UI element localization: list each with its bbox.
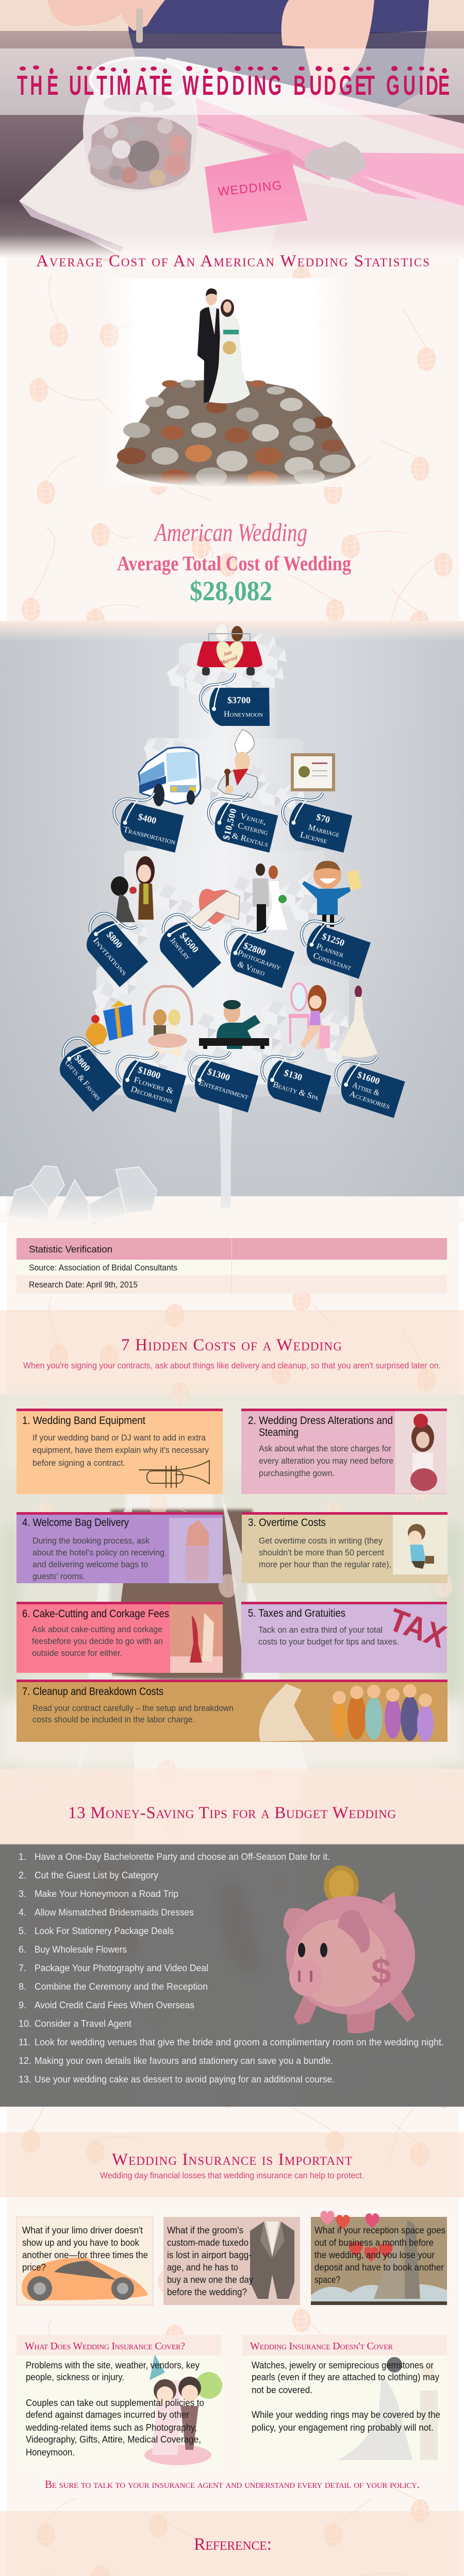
total cost callout: Average Total Cost of Wedding [117,552,351,575]
statistic verification table: Statistic Verification [29,1244,112,1255]
price tag: transportation: Transportation [122,825,176,846]
icon: just married car [197,624,262,675]
wedding cake cost breakdown [0,621,464,1224]
card 7: cleanup and breakdown costs: costs should be included in the labor charge. [32,1715,195,1724]
card 1: wedding band equipment: equipment, have them explain why it's necessary [32,1446,209,1455]
money-saving tips list on dark panel: Buy Wholesale Flowers [35,1944,127,1955]
hidden costs header band: 7 Hidden Costs of a Wedding [121,1336,342,1354]
icon: piggy bank with coin: $ [371,1951,391,1991]
card 5: taxes and gratuities: 5. Taxes and Gratuities [248,1607,345,1619]
insurance scenario card: reception: out of business a month before [314,2238,434,2248]
coin jar [83,58,197,192]
card 2: wedding dress alterations [241,1409,447,1494]
price tag: gifts and favors: $800 [72,1053,92,1073]
icon: piggy bank with coin [284,1866,415,2033]
insurance scenario card: limo [16,2217,153,2305]
money-saving tips list on dark panel: 11. [19,2037,31,2047]
panel: what insurance doesn't cover: policy, your engagement ring probably will not. [252,2422,434,2433]
insurance scenario card: reception: What if your reception space goes [314,2225,445,2235]
panel: what insurance doesn't cover: pearls (even if they are attached to clothing) may [252,2372,439,2382]
photo: cake topper couple on coin pile [103,278,356,487]
heading: average cost: Average Cost of An American Wedding Statistics [36,252,429,270]
pink sticky note: WEDDING [217,178,283,199]
card 1: wedding band equipment: 1. Wedding Band Equipment [22,1415,145,1427]
price tag: planner consultant: Consultant [312,951,353,972]
total cost callout: American Wedding [154,518,307,547]
price tag: transportation [108,785,188,853]
price tag: flowers and decorations: Decorations [130,1084,174,1106]
card 4: welcome bag delivery: During the booking process, ask [32,1536,150,1546]
pink satin ribbon [195,88,464,258]
illustration: orange sports car [22,2258,148,2301]
money-saving tips list on dark panel: 1. [19,1852,26,1862]
crystal brooch [305,141,366,180]
icon: wedding dress bride [337,986,377,1057]
card 4: welcome bag delivery: and delivering welcome bags to [32,1560,148,1569]
money-saving tips list on dark panel: Consider a Travel Agent [35,2019,131,2029]
coin pile [116,380,356,487]
insurance scenario card: reception: the wedding, and you lose your [314,2250,435,2260]
insurance scenario card: tuxedo [163,2217,300,2305]
price tag: attire and accessories: Attire & [351,1081,381,1098]
price tag: honeymoon: Honeymoon [224,710,263,719]
price tag: photography and video: & Video [237,960,266,978]
icon: proposal couple [111,856,155,922]
card 1: wedding band equipment: before signing a contract. [32,1459,125,1468]
main title: THE ULTIMATE WEDDING BUDGET GUIDE [17,70,450,101]
card 1: wedding band equipment: If your wedding band or DJ want to add in extra [32,1433,206,1443]
money-saving tips list on dark panel: 12. [19,2056,31,2066]
money-saving tips list on dark panel: Allow Mismatched Bridesmaids Dresses [35,1907,194,1918]
price tag: gifts and favors: Gifts & Favors [63,1058,103,1102]
price tag: planner consultant [293,906,376,979]
insurance scenario card: reception: deposit and have to book another [314,2262,444,2273]
price tag: venue, catering and rentals: $10,500 [221,807,239,841]
insurance scenario card: limo: show up and you have to book [22,2238,140,2248]
money-saving tips list on dark panel: 5. [19,1926,26,1936]
icon: flowers and couple [144,986,192,1056]
panel: what insurance covers: people, sickness or injury. [26,2372,124,2382]
insurance scenario card: tuxedo: buy a new one the day [167,2275,253,2285]
card 6: cake-cutting and corkage fees: 6. Cake-Cutting and Corkage Fees [22,1608,169,1620]
price tag: venue, catering and rentals: & Rentals [231,832,269,849]
insurance scenario card: reception: space? [314,2275,340,2285]
price tag: entertainment: Entertainment [197,1078,250,1101]
illustration: tuxedo jacket [250,2222,294,2299]
card 2: wedding dress alterations: 2. Wedding Dress Alterations and [248,1415,393,1427]
card 7: cleanup and breakdown costs: Read your contract carefully – the setup and breakdown [32,1704,234,1713]
total cost callout [117,518,351,606]
card 1: wedding band equipment [16,1409,223,1494]
illustration: running office man [393,1515,448,1574]
money-saving tips list on dark panel: 10. [19,2019,31,2029]
groom [197,289,222,403]
price tag: flowers and decorations: $1800 [137,1064,162,1081]
panel: what insurance covers [16,2335,222,2465]
card 6: cake-cutting and corkage fees: outside source for either. [32,1649,122,1658]
panel: what insurance doesn't cover: While your wedding rings may be covered by the [252,2410,440,2420]
money-saving tips list on dark panel: 3. [19,1889,26,1899]
panel: what insurance doesn't cover: Watches, jewelry or semiprecious gemstones or [252,2360,434,2370]
hidden costs header band [0,1310,464,1395]
insurance scenario card: tuxedo: custom-made tuxedo [167,2238,248,2248]
price tag: flowers and decorations: Flowers & [132,1075,175,1096]
card 4: welcome bag delivery: 4. Welcome Bag Delivery [22,1517,129,1529]
price tag: beauty and spa: $130 [283,1067,304,1082]
icon: TAX letters: TAX [384,1602,451,1655]
panel: what insurance covers: Problems with the site, weather, vendors, key [26,2360,200,2370]
card 3: overtime costs [242,1512,448,1583]
icon: DJ [199,1000,269,1049]
card 6: cake-cutting and corkage fees [16,1602,223,1673]
price tag: marriage license: Marriage [307,823,341,839]
card 3: overtime costs: shouldn't be more than 50 percent [259,1548,384,1557]
insurance scenario card: limo: another one—for three times the [22,2250,148,2260]
money-saving tips list on dark panel [0,1844,464,2107]
money-saving tips list on dark panel: Use your wedding cake as dessert to avoid paying for an additional course. [35,2074,335,2084]
price tag: beauty and spa [254,1042,336,1112]
card 3: overtime costs: Get overtime costs in writing (they [259,1536,383,1546]
hidden costs header band: When you're signing your contracts, ask about things like delivery and cleanup, so that you aren't surprised later on. [23,1361,441,1370]
icon: vanity girl [289,984,330,1049]
card 2: wedding dress alterations: every alteration you may need before [259,1456,393,1466]
price tag: photography and video: $2800 [242,940,268,958]
bride [209,299,250,403]
left hand dropping a coin [47,0,165,43]
illustration: watercolor couple [338,2357,438,2460]
insurance header band: Wedding Insurance is Important [112,2150,352,2169]
price tag: beauty and spa: Beauty & Spa [272,1080,320,1103]
white wedding book [19,58,464,258]
money-saving tips list on dark panel: 4. [19,1907,26,1918]
right hand [281,0,374,99]
total cost callout: $28,082 [190,575,272,606]
blurred bride photograph background [0,1395,464,2107]
panel: what insurance doesn't cover: not be covered. [252,2385,312,2395]
card 2: wedding dress alterations: purchasingthe gown. [259,1469,335,1478]
card 4: welcome bag delivery: about the hotel's policy on receiving [32,1548,164,1557]
illustration: sweeping man and children [259,1684,434,1742]
pink sticky note [205,151,308,233]
price tag: honeymoon: $3700 [227,695,251,705]
price tag: invitations: Invitations [91,936,129,977]
reference header band: Reference: [194,2535,272,2554]
card 6: cake-cutting and corkage fees: feesbefore you decide to go with an [32,1637,163,1646]
photo: bride with flower arch [395,1411,447,1494]
money-saving tips header band [0,1769,464,1844]
price tag: venue, catering and rentals [202,785,282,853]
price tag: attire and accessories: $1600 [356,1070,381,1087]
card 7: cleanup and breakdown costs [16,1680,448,1742]
insurance scenario card: tuxedo: age, and he has to [167,2262,238,2273]
icon: bus [139,748,201,806]
price tag: attire and accessories [328,1046,410,1118]
card 6: cake-cutting and corkage fees: Ask about cake-cutting and corkage [32,1625,162,1634]
card 4: welcome bag delivery [16,1512,223,1583]
illustration: couple with heart balloons [311,2211,447,2305]
insurance scenario card: tuxedo: is lost in airport bagg- [167,2250,252,2260]
insurance scenario card: limo: price? [22,2262,46,2273]
price tag: jewelry: $4500 [178,930,201,955]
card 3: overtime costs: 3. Overtime Costs [248,1517,326,1529]
money-saving tips header band: 13 Money-Saving Tips for a Budget Wedding [68,1804,396,1822]
hero photo: hands, coin jar and pink wedding book [0,0,464,258]
price tag: venue, catering and rentals: Venue, [239,811,267,826]
icon: bride and groom photo [253,863,288,933]
money-saving tips list on dark panel: Cut the Guest List by Category [35,1870,158,1880]
icon: chef [218,730,258,798]
price tag: marriage license: $70 [315,811,331,825]
panel: what insurance doesn't cover [242,2335,447,2465]
card 4: welcome bag delivery: guests' rooms. [32,1572,85,1581]
price tag: flowers and decorations [109,1042,191,1112]
cake tiers [73,632,372,1208]
icon: happy planner [302,861,362,927]
panel: what insurance covers: Honeymoon. [26,2447,75,2458]
card 5: taxes and gratuities: Tack on an extra third of your total [258,1625,383,1635]
price tag: photography and video: Photography [236,948,282,972]
money-saving tips list on dark panel: 8. [19,1981,26,1992]
price tag: gifts and favors [47,1025,133,1112]
panel: what insurance covers: Videography, Gifts, Attire, Medical Coverage, [26,2434,201,2445]
money-saving tips list on dark panel: Package Your Photography and Video Deal [35,1963,208,1973]
panel: what insurance covers: Couples can take out supplemental policies to [26,2398,204,2408]
card 7: cleanup and breakdown costs: 7. Cleanup and Breakdown Costs [22,1686,163,1698]
illustration: cartoon bride and groom on cake [144,2354,222,2465]
money-saving tips list on dark panel: Avoid Credit Card Fees When Overseas [35,2000,194,2010]
price tag: entertainment: $1300 [206,1066,231,1083]
money-saving tips list on dark panel: Making your own details like favours and stationery can save you a bundle. [35,2056,333,2066]
icon: marriage certificate [291,753,335,791]
money-saving tips list on dark panel: 13. [19,2074,31,2084]
statistic verification table: Research Date: April 9th, 2015 [29,1280,138,1290]
card 5: taxes and gratuities: costs to your budget for tips and taxes. [258,1637,399,1647]
insurance agent note: Be sure to talk to your insurance agent and understand every detail of your policy. [45,2478,420,2490]
insurance scenario card: tuxedo: What if the groom's [167,2225,243,2235]
statistic verification table: Source: Association of Bridal Consultants [29,1263,177,1273]
price tag: jewelry: Jewelry [168,936,192,962]
icon: gifts [86,1001,133,1046]
panel: what insurance doesn't cover: Wedding Insurance Doesn't Cover [250,2341,393,2352]
insurance scenario card: reception [311,2211,447,2305]
icon: ring hands [187,889,240,927]
price tag: photography and video [217,914,300,988]
card 3: overtime costs: more per hour than the regular rate), [259,1560,391,1569]
price tag: attire and accessories: Accessories [349,1090,391,1111]
photo: welcome bag [169,1518,223,1583]
price tag: entertainment [181,1042,263,1112]
money-saving tips list on dark panel: 2. [19,1870,26,1880]
money-saving tips list on dark panel: 6. [19,1944,26,1955]
price tag: marriage license: License [299,831,328,845]
card 2: wedding dress alterations: Ask about what the store charges for [259,1444,391,1453]
insurance header band [0,2132,464,2197]
money-saving tips list on dark panel: Make Your Honeymoon a Road Trip [35,1889,178,1899]
price tag: honeymoon [201,673,270,726]
price tag: jewelry [147,901,233,988]
photo: cake topper couple [170,1605,223,1673]
price tag: venue, catering and rentals: Catering [237,821,269,837]
icon: just married car: Married [220,655,239,666]
card 2: wedding dress alterations: Steaming [259,1427,299,1438]
money-saving tips list on dark panel: 7. [19,1963,26,1973]
reference header band [0,2511,464,2576]
money-saving tips list on dark panel: Look For Stationery Package Deals [35,1926,174,1936]
panel: what insurance covers: defend against damages incurred by other [26,2410,189,2420]
price tag: marriage license [276,785,356,853]
money-saving tips list on dark panel: Look for wedding venues that give the bride and groom a complimentary room on the wedding night. [35,2037,444,2047]
icon: trumpet [139,1461,209,1488]
statistic verification table [16,1238,447,1294]
card 5: taxes and gratuities [241,1602,451,1673]
crystals on table [8,1166,157,1224]
panel: what insurance covers: What Does Wedding Insurance Cover? [25,2341,185,2352]
icon: just married car: Just [223,649,233,657]
insurance scenario card: tuxedo: before the wedding? [167,2287,247,2297]
price tag: planner consultant: $1250 [321,931,346,948]
price tag: invitations: $800 [105,929,125,950]
insurance header band: Wedding day financial losses that wedding insurance can help to protect. [100,2171,364,2180]
insurance scenario card: limo: What if your limo driver doesn't [22,2225,143,2235]
money-saving tips list on dark panel: 9. [19,2000,26,2010]
money-saving tips list on dark panel: Combine the Ceremony and the Reception [35,1981,208,1992]
price tag: invitations [74,900,160,987]
money-saving tips list on dark panel: Have a One-Day Bachelorette Party and choose an Off-Season Date for it. [35,1852,330,1862]
translucent title band [0,48,464,115]
panel: what insurance covers: wedding-related items such as Photography, [25,2422,197,2433]
price tag: transportation: $400 [137,811,158,826]
price tag: planner consultant: Planner [315,942,345,959]
